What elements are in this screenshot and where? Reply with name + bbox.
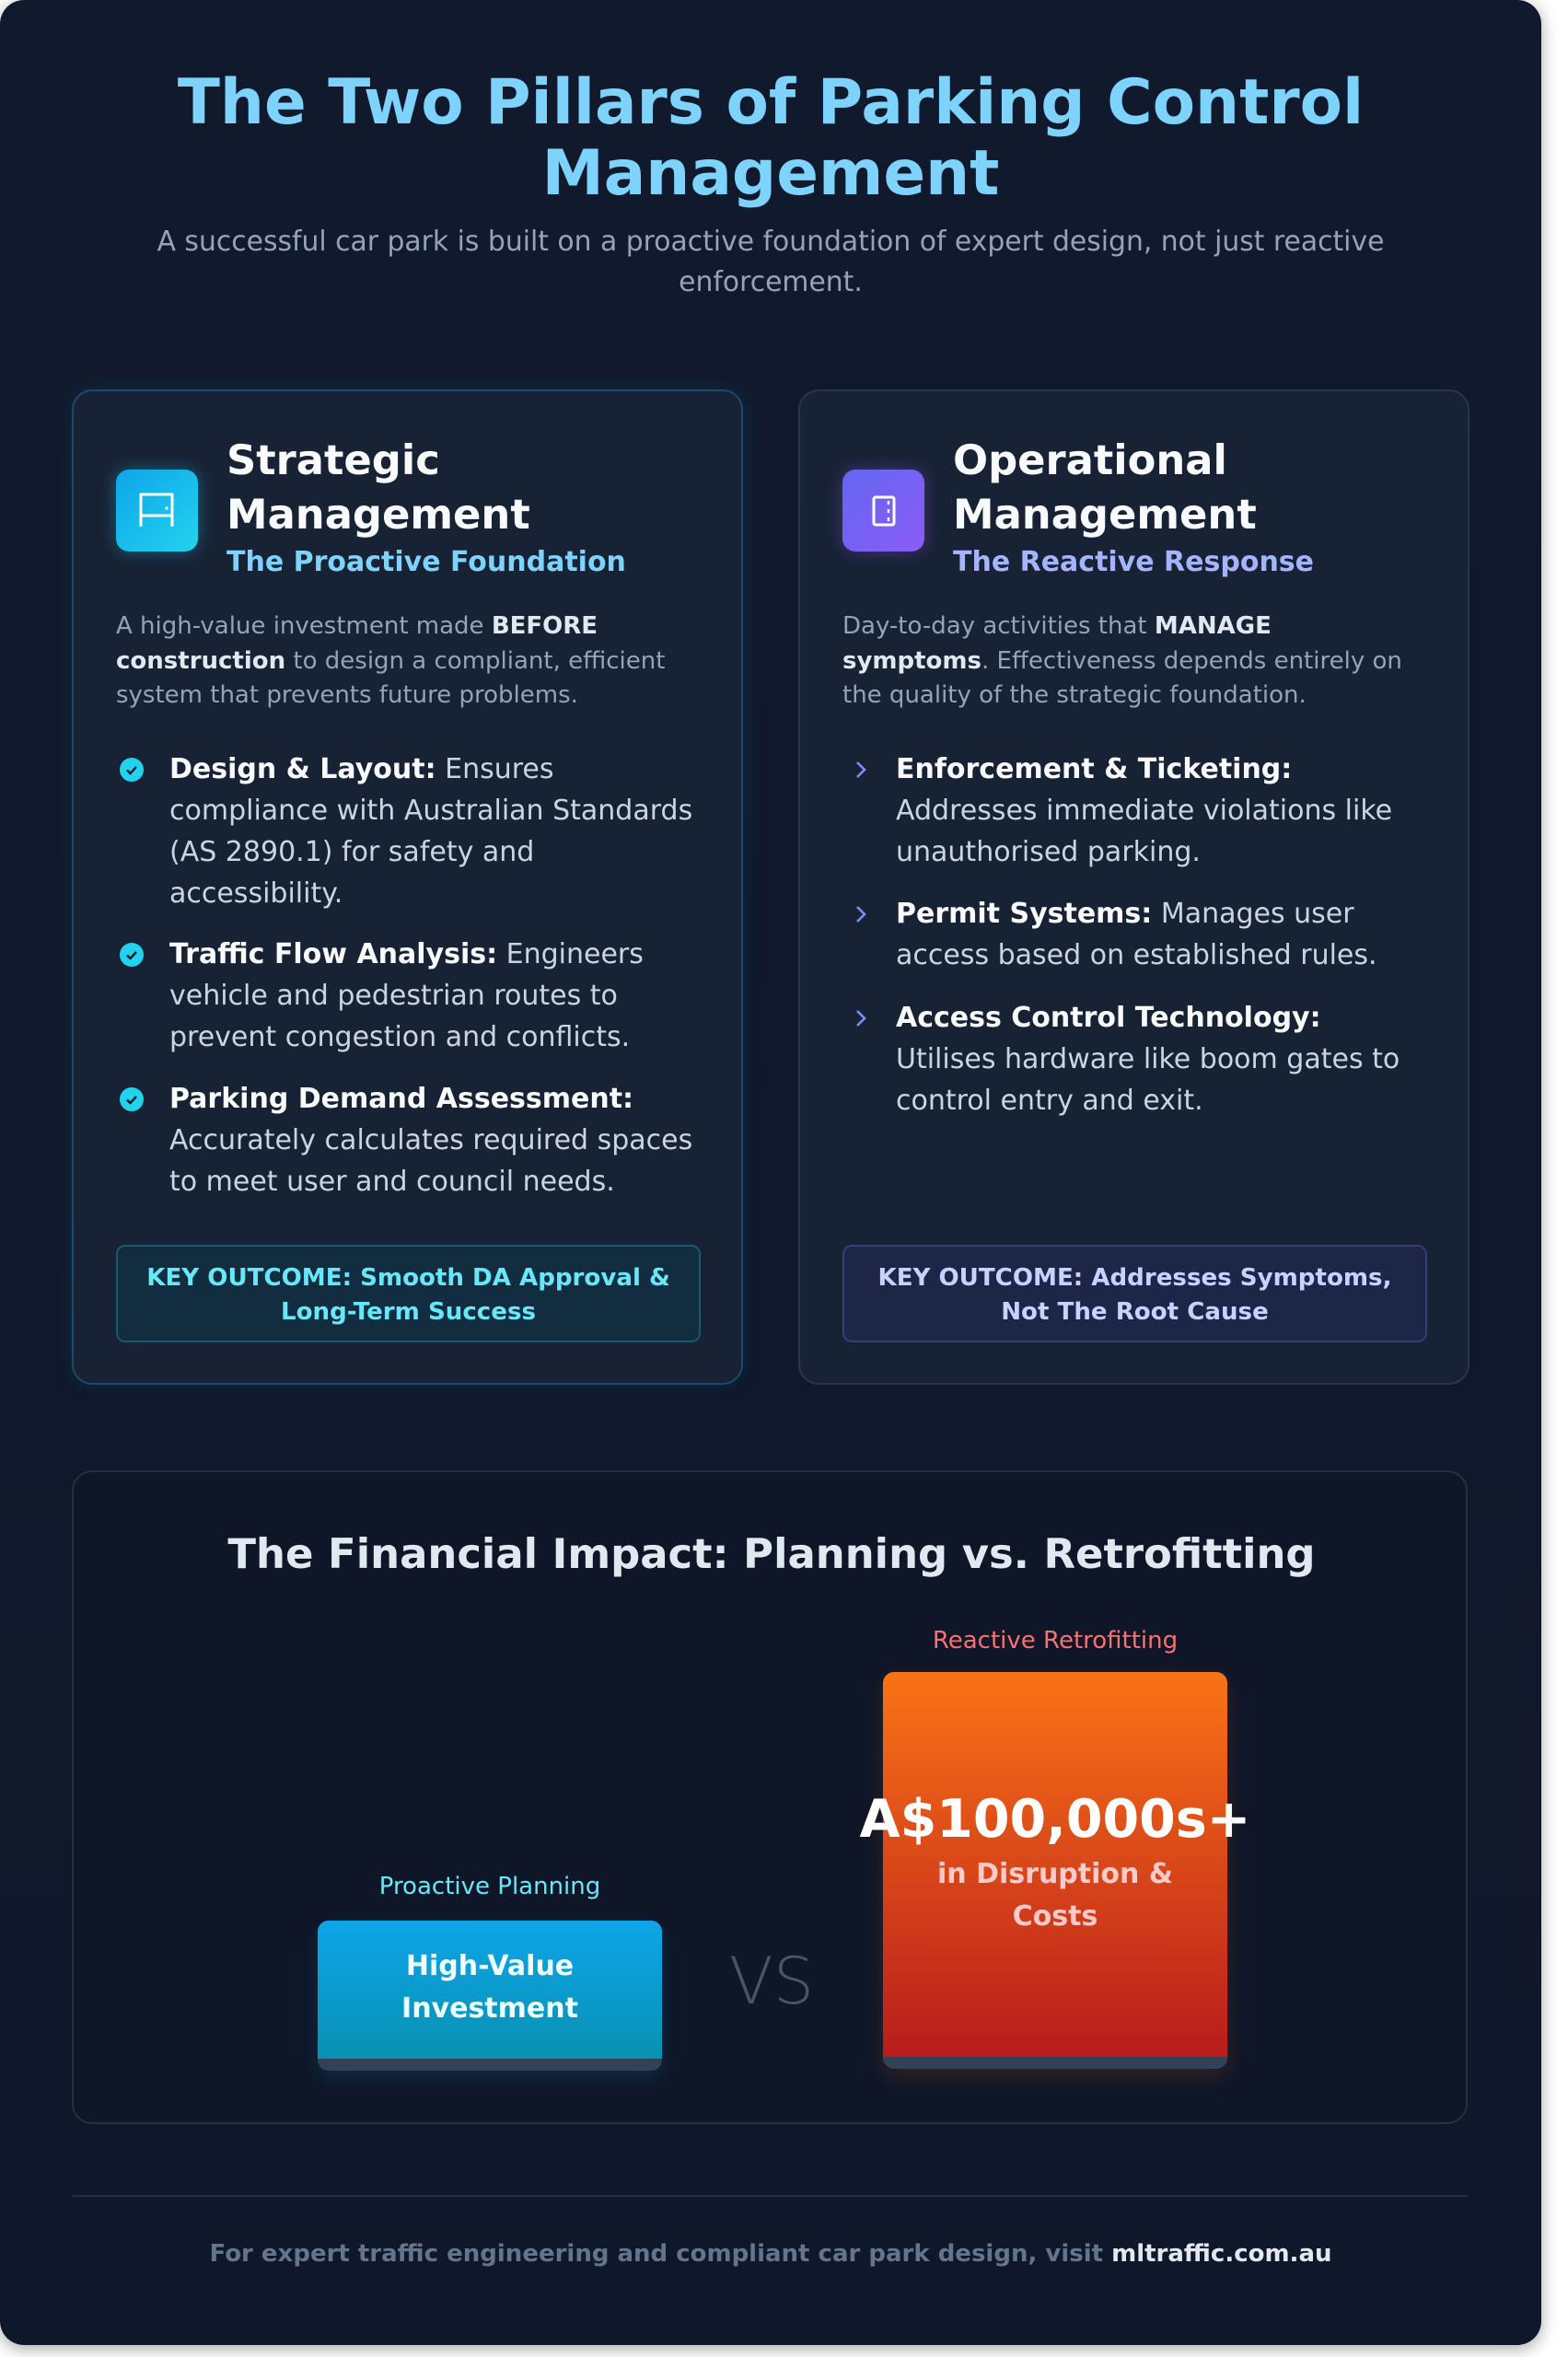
item: parking demand: Accurately calculates required spaces	[169, 1124, 692, 1156]
description: system that prevents future problems.	[116, 681, 578, 709]
item: traffic flow: prevent congestion and conflicts.	[169, 1021, 630, 1053]
title	[178, 65, 1364, 209]
key outcome	[842, 1245, 1427, 1342]
description: A high-value investment made BEFORE	[116, 612, 598, 640]
item: access control: control entry and exit.	[896, 1085, 1203, 1117]
value: cost: Costs	[1013, 1900, 1098, 1933]
subtitle	[157, 226, 1384, 298]
description	[842, 612, 1402, 709]
item: access control: Access Control Technology:	[896, 1002, 1321, 1034]
item: traffic flow: vehicle and pedestrian routes to	[169, 980, 618, 1012]
value: cost: A$100,000s+	[859, 1789, 1251, 1850]
bar: reactive	[883, 1672, 1227, 2069]
value: cost	[859, 1789, 1251, 1933]
item: parking demand: Parking Demand Assessment:	[169, 1083, 633, 1115]
icon: ticket	[842, 470, 924, 552]
key outcome: Not The Root Cause	[1001, 1298, 1269, 1326]
icon: door	[116, 470, 198, 552]
vs label: VS	[729, 1944, 814, 2019]
label: proactive: Proactive Planning	[379, 1873, 600, 1900]
item: permit systems: Permit Systems: Manages user	[896, 898, 1354, 930]
item: enforcement	[856, 753, 1392, 868]
subtitle: A successful car park is built on a proactive foundation of expert design, not just reactive	[157, 226, 1384, 258]
divider	[72, 2195, 1468, 2197]
heading: The Financial Impact: Planning vs. Retrofitting	[227, 1529, 1316, 1578]
key outcome	[116, 1245, 701, 1342]
panel: financial impact	[72, 1470, 1468, 2124]
subheading: The Reactive Response	[953, 546, 1314, 578]
description: the quality of the strategic foundation.	[842, 681, 1307, 709]
description: Day-to-day activities that MANAGE	[842, 612, 1272, 640]
heading: Strategic	[226, 435, 440, 484]
description: construction to design a compliant, efficient	[116, 646, 665, 674]
description	[116, 612, 665, 709]
subtitle: enforcement.	[679, 266, 863, 298]
item: design & layout: accessibility.	[169, 877, 343, 910]
bar: proactive: Investment	[401, 1992, 578, 2025]
bar: proactive	[318, 1921, 662, 2071]
bar: proactive: High-Value	[406, 1950, 574, 1982]
heading: Management	[226, 490, 530, 539]
heading	[226, 435, 530, 539]
heading	[953, 435, 1257, 539]
item: parking demand	[120, 1083, 692, 1198]
item: permit systems	[856, 898, 1377, 971]
title: The Two Pillars of Parking Control	[178, 65, 1364, 138]
heading: Operational	[953, 435, 1227, 484]
label: reactive: Reactive Retrofitting	[933, 1627, 1178, 1655]
item: design & layout: Design & Layout: Ensures	[169, 753, 554, 785]
item: design & layout: compliance with Australian Standards	[169, 795, 692, 827]
item: permit systems: access based on established rules.	[896, 939, 1377, 971]
item: enforcement: unauthorised parking.	[896, 836, 1201, 868]
item: traffic flow	[120, 938, 644, 1053]
footer: For expert traffic engineering and compliant car park design, visit mltraffic.com.au	[209, 2240, 1331, 2268]
heading: Management	[953, 490, 1257, 539]
description: symptoms. Effectiveness depends entirely on	[842, 646, 1402, 674]
item: traffic flow: Traffic Flow Analysis: Engineers	[169, 938, 644, 970]
title: Management	[542, 136, 999, 209]
item: access control	[856, 1002, 1400, 1117]
panel: strategic management	[72, 389, 743, 1385]
item: design & layout: (AS 2890.1) for safety and	[169, 836, 534, 868]
panel: operational management	[798, 389, 1469, 1385]
item: enforcement: Enforcement & Ticketing:	[896, 753, 1292, 785]
value: cost: in Disruption &	[937, 1858, 1173, 1890]
item: access control: Utilises hardware like boom gates to	[896, 1043, 1400, 1075]
key outcome: Long-Term Success	[281, 1298, 536, 1326]
item: enforcement: Addresses immediate violations like	[896, 795, 1392, 827]
item: design & layout	[120, 753, 692, 910]
key outcome: KEY OUTCOME: Smooth DA Approval &	[146, 1264, 670, 1292]
key outcome: KEY OUTCOME: Addresses Symptoms,	[877, 1264, 1392, 1292]
subheading: The Proactive Foundation	[226, 546, 626, 578]
item: parking demand: to meet user and council needs.	[169, 1166, 615, 1198]
